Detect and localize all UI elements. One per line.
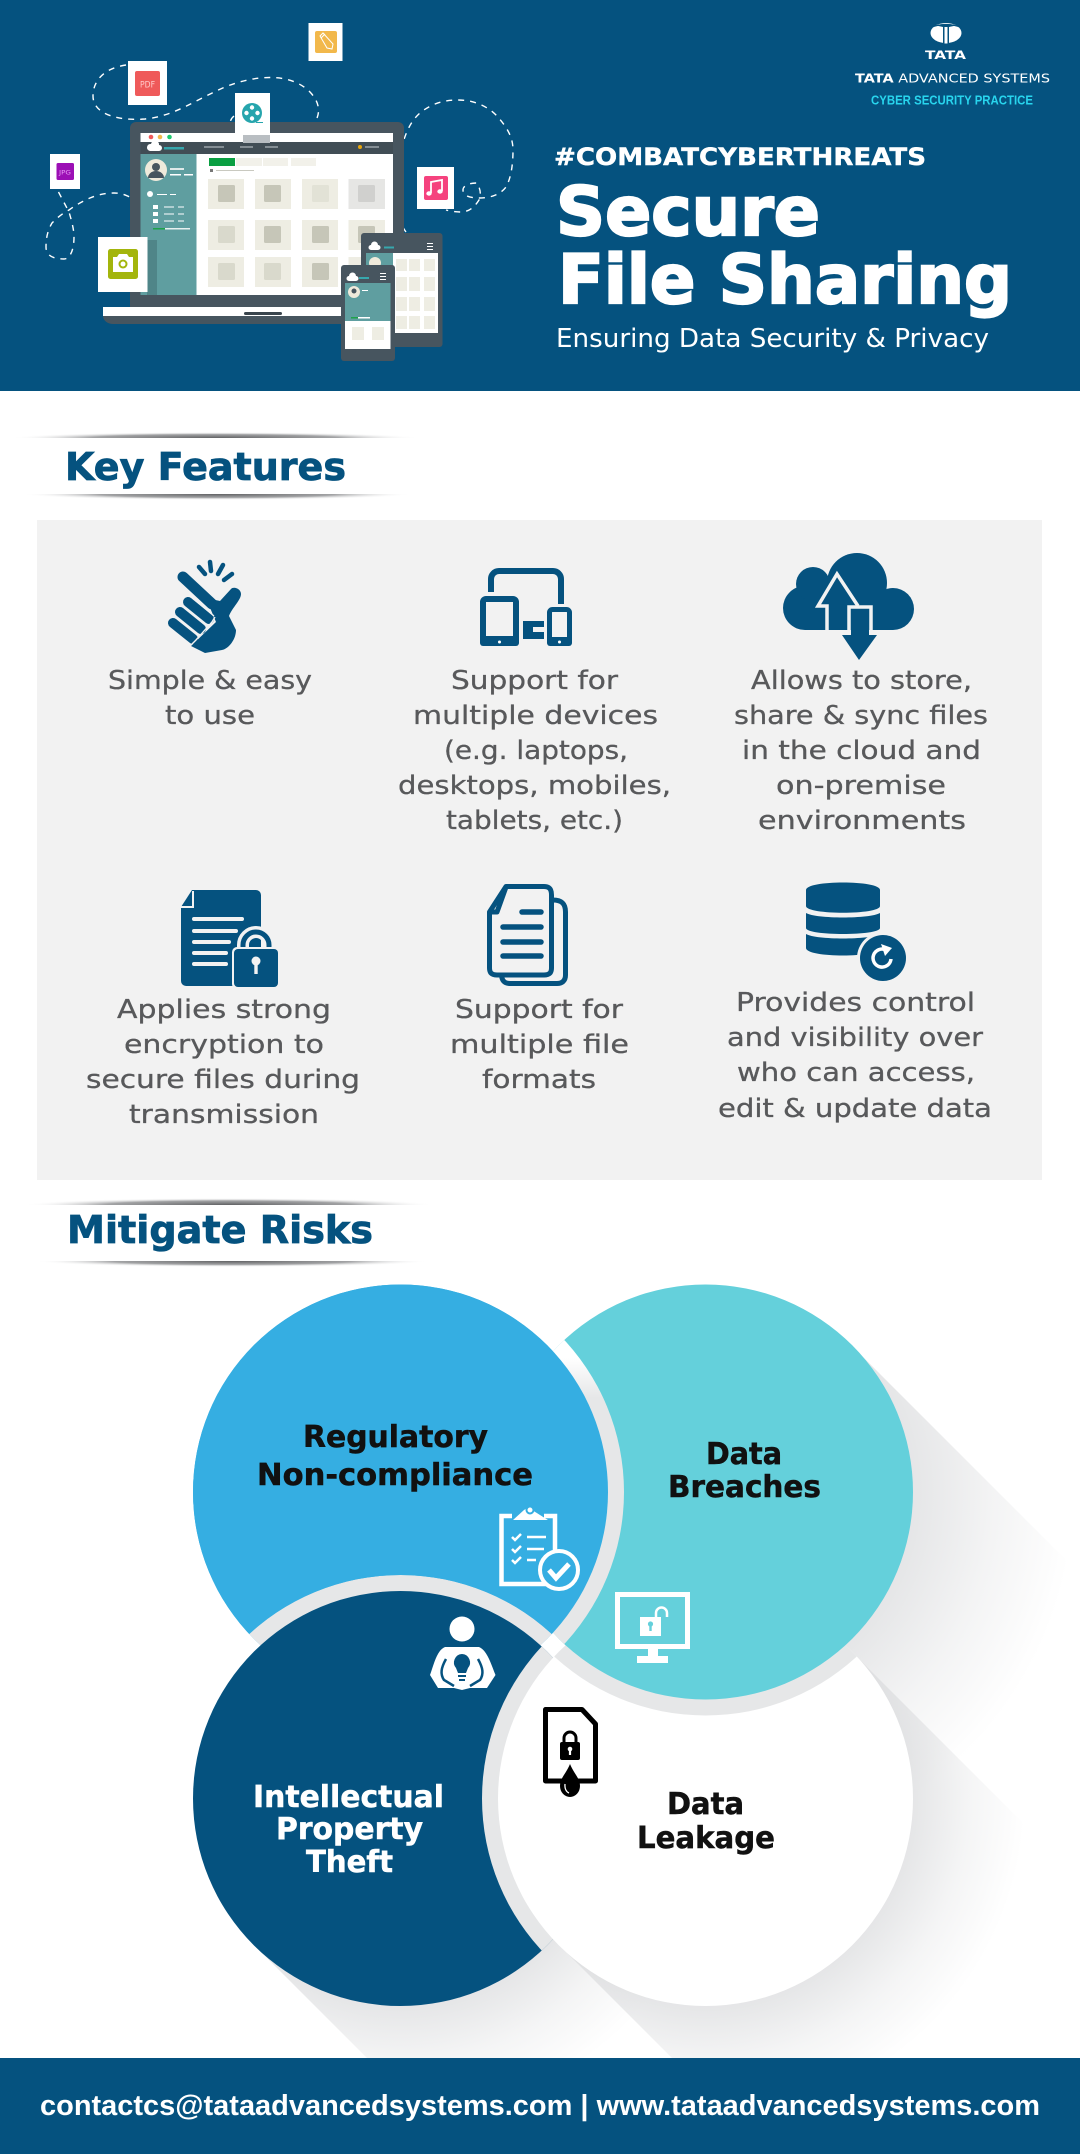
tablet illustration <box>361 233 442 347</box>
label: data leakage: Leakage <box>637 1821 775 1856</box>
label: data breaches <box>668 1437 821 1505</box>
text: strong encryption: transmission <box>129 1100 319 1130</box>
file card: music <box>417 167 454 209</box>
heading: Mitigate Risks <box>49 1199 409 1266</box>
file card: edit <box>308 23 342 61</box>
circle: intellectual property theft <box>193 1591 608 2006</box>
text: simple and easy: to use <box>165 701 255 731</box>
text: store share sync <box>734 666 988 836</box>
icon: clipboard checklist <box>502 1506 578 1589</box>
label: data breaches: Breaches <box>668 1470 821 1505</box>
file card: PDF <box>128 61 167 105</box>
panel: key features <box>37 520 1042 1180</box>
phone illustration <box>341 265 395 361</box>
file card: video <box>235 93 270 133</box>
text: multiple devices <box>398 666 671 836</box>
icon: cloud sync <box>783 553 914 660</box>
text: file formats: multiple file <box>450 1030 629 1060</box>
file card: JPG: JPG <box>58 170 71 176</box>
text: control and visibility: edit & update data <box>718 1094 992 1124</box>
text: control and visibility: who can access, <box>737 1058 975 1088</box>
text: multiple devices: (e.g. laptops, <box>444 736 628 766</box>
file card: JPG <box>50 154 80 189</box>
diagram: risks circles <box>193 1284 1016 2058</box>
text: multiple devices: Support for <box>451 666 618 696</box>
text: file formats: Support for <box>455 995 623 1025</box>
text: multiple devices: desktops, mobiles, <box>398 771 671 801</box>
footer bar: contactcs@tataadvancedsystems.com | www.tataadvancedsystems.com <box>40 2090 1040 2122</box>
text: strong encryption: encryption to <box>124 1030 324 1060</box>
label: data leakage <box>637 1787 775 1856</box>
circle: data leakage <box>498 1591 913 2006</box>
file card: camera <box>98 237 148 292</box>
label: intellectual property theft: Theft <box>306 1845 393 1880</box>
file card: PDF: PDF <box>140 80 155 90</box>
text: control and visibility: and visibility over <box>727 1023 983 1053</box>
label: regulatory: Non-compliance <box>257 1458 533 1493</box>
text: control and visibility: Provides control <box>736 988 975 1018</box>
logo: Tata Advanced Systems <box>855 23 1050 108</box>
text: control and visibility <box>718 988 992 1124</box>
icon: Tata emblem <box>930 23 962 44</box>
laptop illustration <box>103 122 404 324</box>
text: multiple devices: multiple devices <box>413 701 658 731</box>
text: store share sync: in the cloud and <box>742 736 981 766</box>
header banner <box>0 0 1080 391</box>
subtitle: Ensuring Data Security & Privacy <box>556 324 989 354</box>
text: store share sync: on-premise <box>776 771 946 801</box>
icon: devices <box>480 571 572 646</box>
text: store share sync: Allows to store, <box>751 666 972 696</box>
text: strong encryption <box>86 995 360 1130</box>
footer bar <box>0 2058 1080 2154</box>
hashtag: #COMBATCYBERTHREATS <box>554 143 926 171</box>
icon: snapping hand <box>173 562 241 653</box>
logo: Tata Advanced Systems: TATA <box>925 48 966 62</box>
text: strong encryption: secure files during <box>86 1065 360 1095</box>
text: store share sync: environments <box>758 806 966 836</box>
icon: documents <box>490 886 566 984</box>
icon: unlocked monitor <box>618 1594 688 1663</box>
icon: person with idea <box>430 1616 496 1690</box>
text: file formats <box>450 995 629 1095</box>
circle: regulatory base <box>193 1284 608 1700</box>
text: simple and easy: Simple & easy <box>108 666 312 696</box>
circle: data breaches <box>498 1284 913 1700</box>
circle: regulatory overlap <box>193 1284 608 1634</box>
heading: Mitigate Risks: Mitigate Risks <box>67 1208 373 1252</box>
label: data breaches: Data <box>706 1437 782 1472</box>
text: simple and easy <box>108 666 312 731</box>
icon: database refresh <box>806 882 909 984</box>
text: store share sync: share & sync files <box>734 701 988 731</box>
label: intellectual property theft: Property <box>276 1812 423 1847</box>
long shadows <box>254 1346 1080 2058</box>
logo: Tata Advanced Systems: CYBER SECURITY PRACTICE <box>871 92 1033 108</box>
text: strong encryption: Applies strong <box>117 995 331 1025</box>
title: Secure <box>556 173 820 252</box>
logo: Tata Advanced Systems: TATA ADVANCED SYSTEMS <box>855 70 1050 86</box>
text: file formats: formats <box>482 1065 596 1095</box>
icon: locked document <box>181 890 280 989</box>
title: File Sharing <box>558 241 1012 320</box>
dashed file paths <box>46 65 513 260</box>
label: data leakage: Data <box>667 1787 744 1822</box>
heading: Key Features <box>34 432 395 500</box>
label: regulatory: Regulatory <box>303 1420 488 1455</box>
label: regulatory <box>257 1420 533 1493</box>
heading: Key Features: Key Features <box>65 445 346 489</box>
label: intellectual property theft: Intellectual <box>253 1780 444 1815</box>
label: intellectual property theft <box>253 1780 444 1880</box>
icon: document leak <box>546 1710 596 1797</box>
title <box>556 173 1012 320</box>
text: multiple devices: tablets, etc.) <box>446 806 623 836</box>
